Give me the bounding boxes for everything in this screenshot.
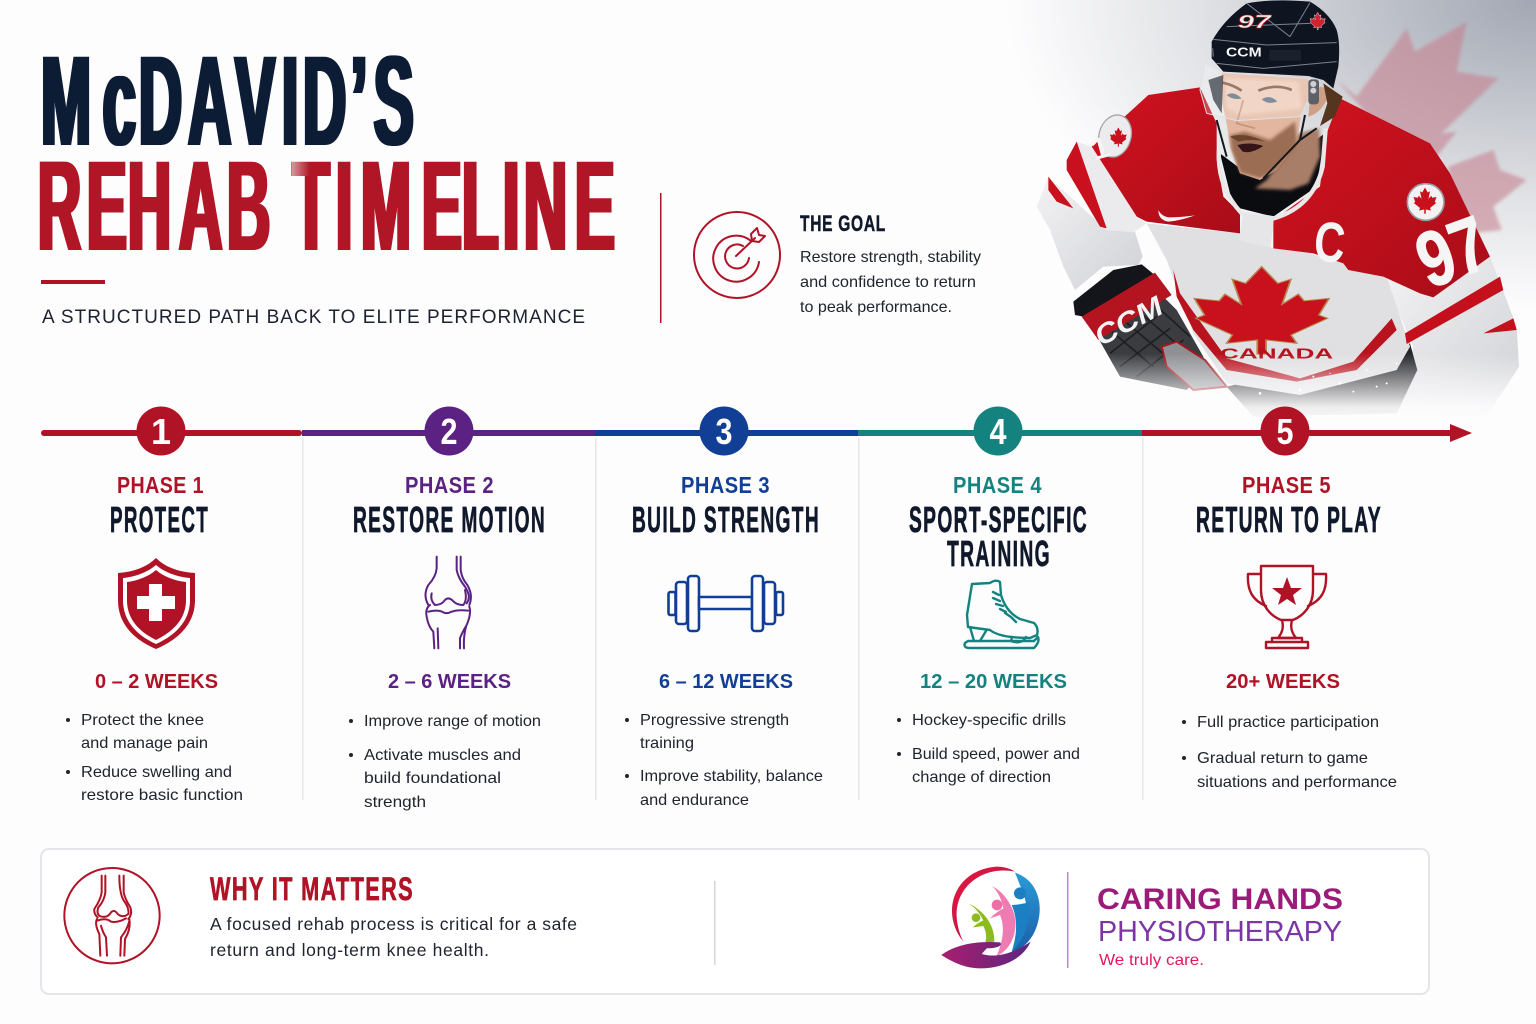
- panel: phase 4: 12 – 20 WEEKS: [920, 671, 1067, 693]
- goal text: to peak performance.: [800, 299, 952, 316]
- panel: phase 4: [897, 472, 1088, 786]
- marker 5: [1260, 406, 1310, 456]
- timeline: [41, 406, 1472, 456]
- panel: phase 4: Build speed, power and: [912, 746, 1080, 763]
- panel: phase 2: strength: [364, 794, 426, 811]
- icon: knee in circle: [64, 868, 160, 963]
- hero image: hockey player with maple leaf backdrop: CANADA: [1220, 346, 1334, 362]
- bottom fade: [1013, 353, 1536, 428]
- panel: phase 2: 2 – 6 WEEKS: [388, 671, 511, 693]
- panel: phase 1: and manage pain: [81, 735, 208, 752]
- panel: phase 1: PROTECT: [110, 499, 209, 540]
- panel: phase 2: Improve range of motion: [364, 713, 541, 730]
- right arm: [1383, 257, 1519, 417]
- panel: phase 4: Hockey-specific drills: [912, 712, 1066, 729]
- panel: phase 2: RESTORE MOTION: [353, 499, 546, 540]
- panel: phase 5: RETURN TO PLAY: [1196, 499, 1382, 540]
- eyes: [1227, 93, 1277, 103]
- beard: [1230, 122, 1297, 178]
- backdrop maple leaf: [1337, 22, 1527, 233]
- marker 1: 1: [151, 411, 171, 452]
- marker 5: 5: [1276, 411, 1294, 452]
- why text: return and long-term knee health.: [210, 940, 489, 960]
- panel: phase 1: restore basic function: [81, 787, 243, 804]
- panel: phase 5: Gradual return to game: [1197, 750, 1368, 767]
- glove: [1098, 293, 1207, 390]
- marker 4: [974, 406, 1022, 456]
- title line 2: REHAB TIMELINE: [38, 135, 615, 278]
- marker 3: [700, 406, 748, 456]
- logo wordmark: We truly care.: [1099, 952, 1204, 969]
- red torso stripe: [1173, 270, 1397, 382]
- panel: phase 2: PHASE 2: [405, 472, 494, 498]
- white torso: [1147, 223, 1410, 395]
- black neck: [1220, 133, 1325, 217]
- right shoulder red: [1273, 98, 1490, 297]
- head: CCM: [1226, 46, 1262, 60]
- ice spray: [1259, 362, 1398, 395]
- logo wordmark: CARING HANDS: [1097, 883, 1343, 916]
- goal text: THE GOAL: [800, 211, 886, 236]
- panel: phase 1: PHASE 1: [117, 472, 204, 498]
- hero image: hockey player with maple leaf backdrop: [1000, 0, 1536, 435]
- right shoulder badge: [1407, 184, 1444, 220]
- panel: phase 5: PHASE 5: [1242, 472, 1331, 498]
- left shoulder red: [1092, 87, 1240, 233]
- panel: phase 1: [66, 472, 243, 804]
- left shoulder badge: [1094, 111, 1136, 161]
- hand: [941, 942, 1031, 968]
- panel: phase 3: [625, 472, 823, 809]
- captain C: C: [1312, 210, 1348, 276]
- face: [1222, 73, 1308, 180]
- marker 1: [136, 406, 186, 456]
- head: 97: [1237, 11, 1273, 32]
- arrowhead: [1450, 424, 1472, 442]
- hero image: hockey player with maple leaf backdrop: CCM: [1089, 290, 1169, 352]
- panel: phase 3: and endurance: [640, 792, 749, 809]
- why heading: WHY IT MATTERS: [210, 871, 414, 907]
- marker 3: 3: [716, 411, 732, 452]
- panel: phase 3: PHASE 3: [681, 472, 770, 498]
- panel: phase 4: TRAINING: [947, 533, 1051, 574]
- panel: phase 5: [1182, 472, 1397, 791]
- upper face highlight: [1225, 78, 1302, 115]
- icon: ice skate: [965, 581, 1038, 648]
- neck skin: [1255, 128, 1320, 190]
- panel: phase 1: Reduce swelling and: [81, 764, 232, 781]
- panel: phase 4: SPORT-SPECIFIC: [909, 499, 1088, 540]
- hero image: hockey player with maple leaf backdrop: 1: [1088, 131, 1113, 167]
- left arm: [1037, 177, 1143, 290]
- marker 2: 2: [440, 411, 458, 452]
- panel: phase 4: change of direction: [912, 769, 1051, 786]
- title: [38, 30, 615, 278]
- ear: [1308, 87, 1328, 117]
- goal text: Restore strength, stability: [800, 249, 981, 266]
- goal text: [800, 211, 981, 316]
- icon: dumbbell: [668, 576, 783, 631]
- panel: phase 2: Activate muscles and: [364, 747, 521, 764]
- swoosh: [1158, 210, 1195, 222]
- sleeve number 97: 97: [1405, 199, 1500, 305]
- panel: phase 5: 20+ WEEKS: [1226, 671, 1340, 693]
- title line 1: McDAVID’S: [41, 30, 414, 173]
- logo wordmark: PHYSIOTHERAPY: [1098, 916, 1342, 948]
- marker 4: 4: [990, 411, 1006, 452]
- panel: phase 1: Protect the knee: [81, 712, 204, 729]
- panel: why it matters and logo: [41, 849, 1429, 994]
- panel: phase 3: training: [640, 735, 694, 752]
- panel: phase 3: Progressive strength: [640, 712, 789, 729]
- icon: trophy: [1248, 566, 1326, 648]
- head: [1200, 0, 1343, 190]
- icon: shield: [118, 558, 195, 649]
- logo wordmark: [1097, 883, 1343, 969]
- why text: A focused rehab process is critical for a safe: [210, 914, 577, 934]
- icon: target: [694, 212, 780, 298]
- panel: phase 1: 0 – 2 WEEKS: [95, 671, 218, 693]
- panel: phase 3: 6 – 12 WEEKS: [659, 671, 793, 693]
- visor: [1200, 63, 1310, 121]
- collar: [1219, 128, 1326, 218]
- panel: phase 3: Improve stability, balance: [640, 768, 823, 785]
- subtitle: A STRUCTURED PATH BACK TO ELITE PERFORMANCE: [42, 307, 585, 328]
- panel: phase 3: BUILD STRENGTH: [632, 499, 820, 540]
- helmet: [1212, 0, 1339, 88]
- icon: knee joint: [425, 557, 471, 648]
- logo mark: [941, 867, 1040, 968]
- hair: [1320, 83, 1343, 126]
- why text: [210, 914, 577, 960]
- panel: phase 4: PHASE 4: [953, 472, 1042, 498]
- panel: phase 2: [349, 472, 546, 811]
- marker 2: [424, 406, 474, 456]
- chest maple leaf with gold edge: [1194, 267, 1329, 354]
- panel: phase 5: Full practice participation: [1197, 714, 1379, 731]
- panel: phase 5: situations and performance: [1197, 774, 1397, 791]
- goal text: and confidence to return: [800, 274, 976, 291]
- dark pants: [1227, 343, 1417, 417]
- chin strap: [1217, 115, 1317, 178]
- panel: phase 2: build foundational: [364, 770, 501, 787]
